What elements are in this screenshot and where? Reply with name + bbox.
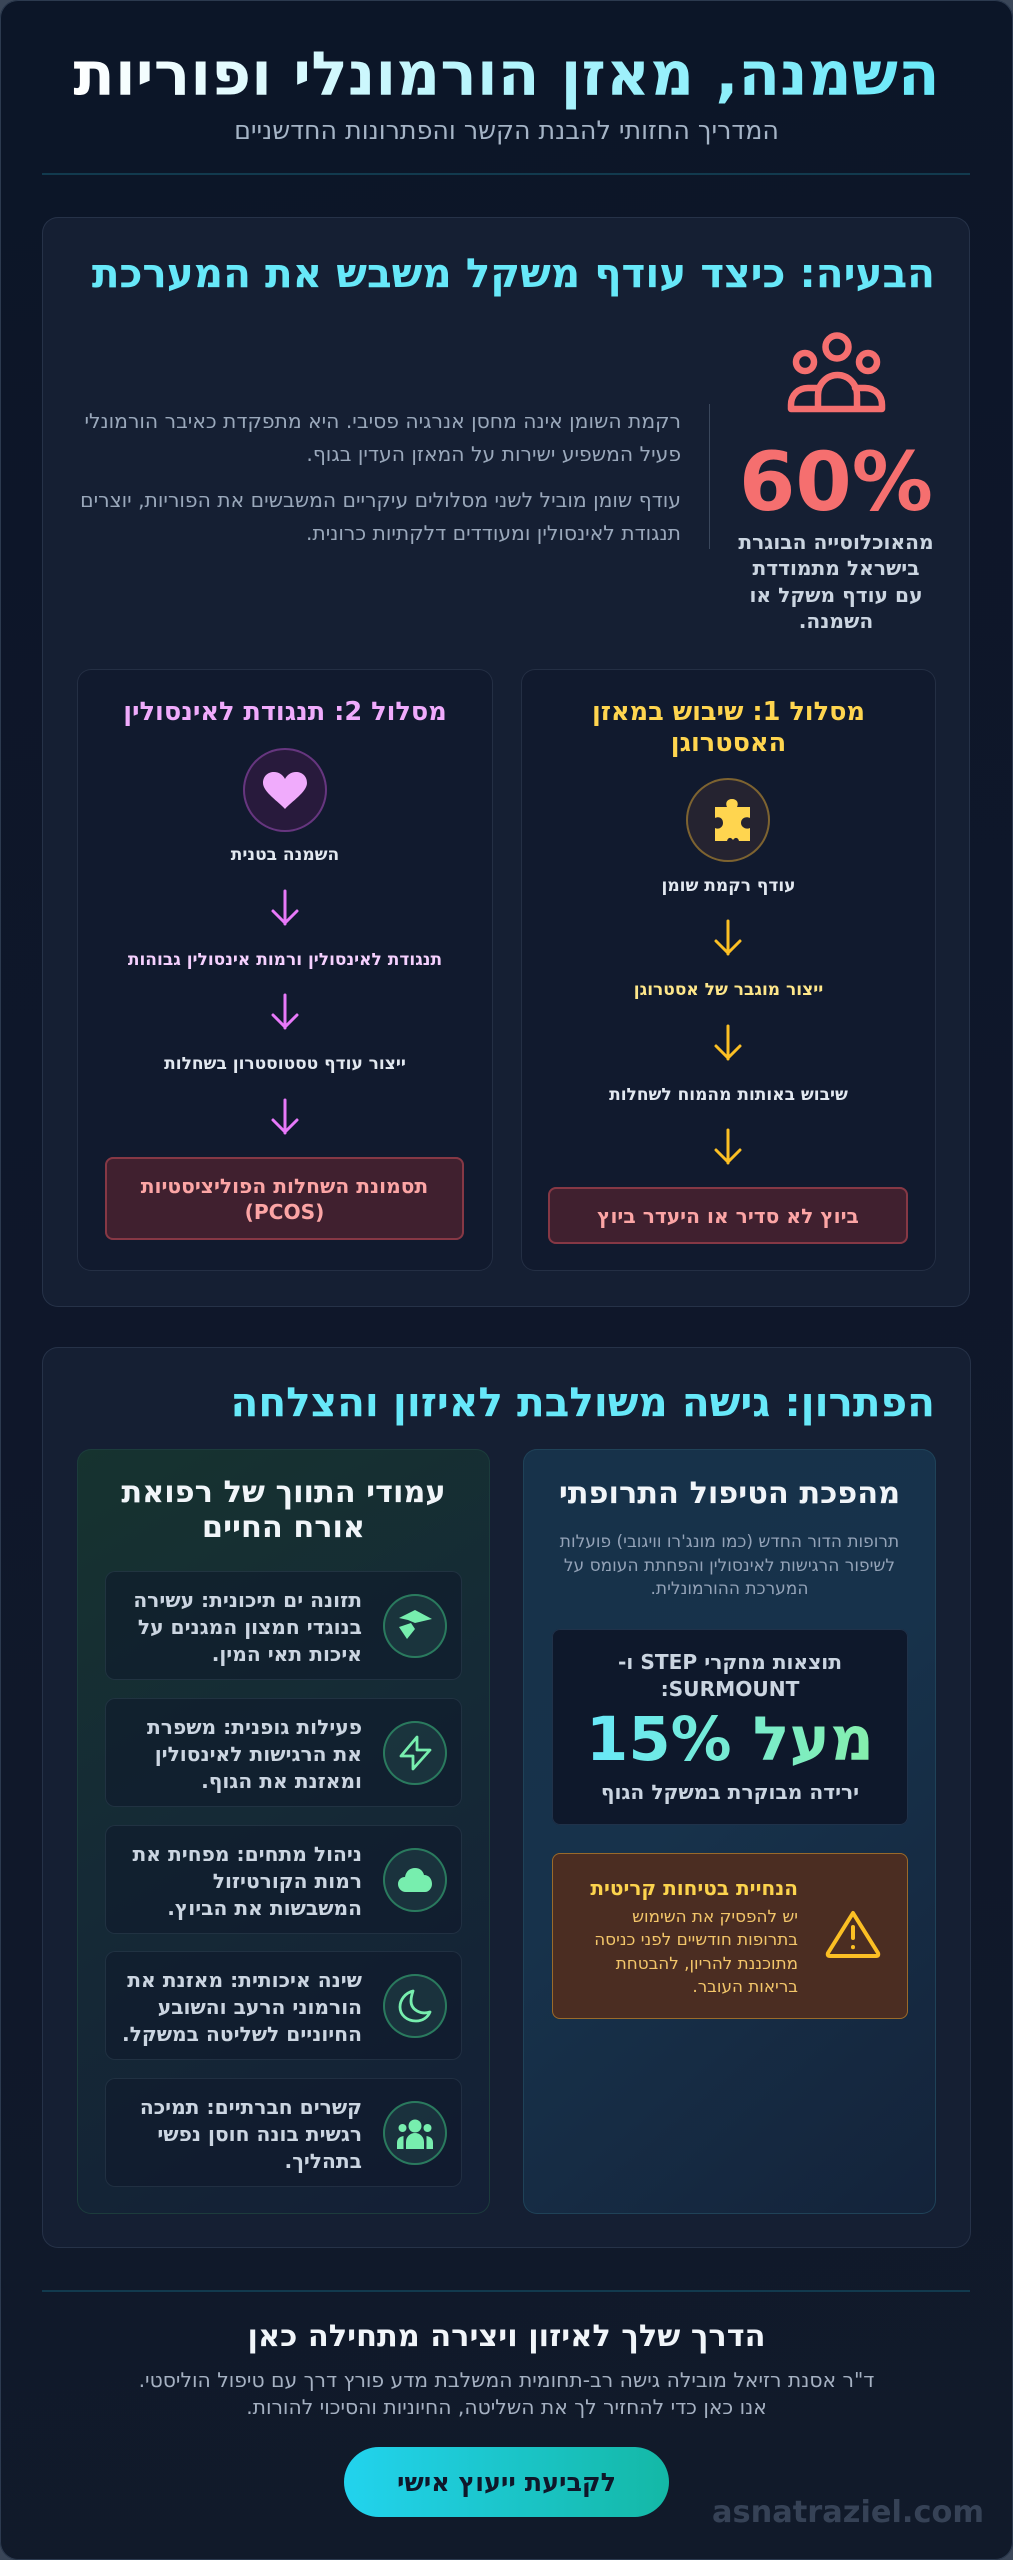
arrow bbox=[271, 994, 299, 1030]
warning text: בתרופות חודשיים לפני כניסה bbox=[594, 1929, 798, 1949]
item text: ניהול מתחים: מפחית את bbox=[132, 1842, 362, 1866]
arrow bbox=[271, 1098, 299, 1134]
item text: פעילות גופנית: משפרת bbox=[147, 1714, 362, 1738]
study heading: SURMOUNT: bbox=[661, 1676, 799, 1700]
icon: people bbox=[383, 2100, 447, 2164]
call to action button bbox=[344, 2447, 669, 2517]
result box: ovulation: ביוץ לא סדיר או היעדר ביוץ bbox=[597, 1204, 859, 1228]
step: signal disruption: שיבוש באותות מהמוח לשחלות bbox=[609, 1085, 848, 1105]
statistic caption: השמנה. bbox=[799, 609, 873, 633]
footer text: אנו כאן כדי להחזיר לך את השליטה, החיוניות והסיכוי להורות. bbox=[246, 2395, 767, 2419]
icon: moon bbox=[383, 1974, 447, 2038]
icon: leaf bbox=[383, 1594, 447, 1658]
item: social ties bbox=[105, 2078, 462, 2187]
icon: warning triangle bbox=[826, 1910, 880, 1958]
result box: PCOS: (PCOS) bbox=[245, 1200, 324, 1224]
step: excess testosterone: ייצור עודף טסטוסטרון בשחלות bbox=[164, 1054, 406, 1074]
icon: group of people bbox=[788, 332, 886, 412]
item text: בתהליך. bbox=[285, 2148, 362, 2172]
arrow bbox=[714, 1128, 742, 1164]
pathway 1 heading: מסלול 1: שיבוש במאזן bbox=[592, 696, 865, 726]
intro text: תנגודת לאינסולין ומעודדים דלקתיות כרונית. bbox=[306, 521, 681, 545]
statistic: 60 percent bbox=[738, 332, 934, 633]
panel: pathway 2 bbox=[77, 669, 493, 1271]
item text bbox=[132, 1842, 362, 1920]
panel: medical revolution bbox=[523, 1449, 936, 2214]
statistic caption: ירידה מבוקרת במשקל הגוף bbox=[601, 1780, 859, 1804]
warning text: בריאות העובר. bbox=[692, 1976, 798, 1996]
result box: PCOS bbox=[105, 1157, 464, 1240]
statistic box: 15 percent bbox=[552, 1629, 908, 1825]
item: mediterranean diet bbox=[105, 1571, 462, 1680]
item text bbox=[133, 1588, 362, 1666]
callout: safety warning bbox=[552, 1853, 908, 2019]
subtitle: המדריך החזותי להבנת הקשר והפתרונות החדשניים bbox=[234, 116, 779, 145]
warning text: יש להפסיק את השימוש bbox=[632, 1906, 798, 1926]
item text bbox=[147, 1714, 362, 1793]
item text: החיוניים לשליטה במשקל. bbox=[122, 2022, 362, 2046]
vertical divider bbox=[709, 404, 710, 549]
statistic caption: עם עודף משקל או bbox=[749, 583, 923, 607]
call to action button: לקביעת ייעוץ אישי bbox=[397, 2467, 616, 2497]
warning text: מתוכננת להריון, להבטחת bbox=[616, 1953, 798, 1973]
pathway 2 heading: מסלול 2: תנגודת לאינסולין bbox=[123, 696, 447, 726]
warning text bbox=[594, 1906, 798, 1996]
item text bbox=[122, 1968, 362, 2046]
arrow bbox=[714, 920, 742, 956]
item text: את הרגישות לאינסולין bbox=[155, 1742, 362, 1766]
item: physical activity bbox=[105, 1698, 462, 1807]
step: excess fat: עודף רקמת שומן bbox=[662, 876, 796, 896]
heading: the problem: הבעיה: כיצד עודף משקל משבש את המערכת bbox=[92, 249, 935, 297]
item text bbox=[140, 2094, 362, 2173]
item text: רמות הקורטיזול bbox=[213, 1868, 362, 1892]
footer heading: הדרך שלך לאיזון ויצירה מתחילה כאן bbox=[248, 2319, 765, 2354]
icon: cloud bbox=[383, 1848, 447, 1912]
item text: איכות תאי המין. bbox=[212, 1642, 362, 1666]
step: increased estrogen: ייצור מוגבר של אסטרוגן bbox=[634, 980, 823, 1000]
intro text: פעיל המשפיע ישירות על המאזן העדין בגוף. עודף שומן מוביל לשני מסלולים עיקריים המשבשים את הפוריות, יוצרים bbox=[80, 442, 681, 512]
panel: pathway 1 bbox=[521, 669, 936, 1271]
item text: ומאזנת את הגוף. bbox=[201, 1768, 362, 1792]
intro text: רקמת השומן אינה מחסן אנרגיה פסיבי. היא מתפקדת כאיבר הורמונלי bbox=[84, 409, 681, 433]
item: quality sleep bbox=[105, 1951, 462, 2060]
pathway 1 heading bbox=[592, 696, 865, 758]
item text: שינה איכותית: מאזנת את bbox=[127, 1968, 362, 1992]
item text: תזונה ים תיכונית: עשירה bbox=[133, 1588, 362, 1612]
icon: lightning bolt bbox=[383, 1720, 447, 1784]
result box: PCOS: תסמונת השחלות הפוליציסטיות bbox=[141, 1174, 428, 1198]
footer text bbox=[139, 2368, 874, 2419]
footer text: ד"ר אסנת רזיאל מובילה גישה רב-תחומית המשלבת מדע פורץ דרך עם טיפול הוליסטי. bbox=[139, 2368, 874, 2392]
arrow bbox=[714, 1024, 742, 1060]
item: stress management bbox=[105, 1825, 462, 1934]
icon: heart bbox=[243, 748, 327, 832]
big number 60%: 60% bbox=[739, 436, 933, 530]
panel: the problem bbox=[42, 217, 970, 1307]
title: השמנה, מאזן הורמונלי ופוריות bbox=[73, 40, 940, 110]
item text: הורמוני הרעב והשובע bbox=[158, 1994, 362, 2018]
result box: ovulation bbox=[548, 1187, 908, 1244]
panel: lifestyle pillars bbox=[77, 1449, 490, 2214]
big number over 15%: מעל 15% bbox=[586, 1705, 874, 1775]
study heading bbox=[618, 1650, 842, 1700]
item text: רגשית בונה חוסן נפשי bbox=[157, 2122, 362, 2146]
item text: בנוגדי חמצון המגנים על bbox=[138, 1614, 362, 1638]
step: abdominal obesity: השמנה בטנית bbox=[231, 845, 339, 865]
icon: puzzle piece bbox=[686, 778, 770, 862]
description bbox=[560, 1532, 899, 1599]
step: insulin resistance: תנגודת לאינסולין ורמות אינסולין גבוהות bbox=[128, 950, 442, 970]
heading: מהפכת הטיפול התרופתי bbox=[559, 1476, 900, 1511]
heading bbox=[121, 1474, 446, 1544]
statistic caption: מהאוכלוסייה הבוגרת bbox=[738, 530, 934, 554]
item text: קשרים חברתיים: תמיכה bbox=[140, 2094, 362, 2118]
description: המערכת ההורמונלית. bbox=[651, 1579, 808, 1599]
item text: המשבשות את הביוץ. bbox=[167, 1896, 362, 1920]
arrow bbox=[271, 890, 299, 926]
description: לשיפור הרגישות לאינסולין והפחתת העומס על bbox=[564, 1556, 895, 1576]
description: תרופות הדור החדש (כמו מונג'רו וויגובי) פועלות bbox=[560, 1532, 899, 1552]
intro text bbox=[80, 409, 681, 545]
statistic caption bbox=[738, 530, 934, 633]
study heading: תוצאות מחקרי STEP ו- bbox=[618, 1650, 842, 1674]
pathway 1 heading: האסטרוגן bbox=[671, 728, 786, 758]
statistic caption: בישראל מתמודדת bbox=[752, 556, 920, 580]
heading: אורח החיים bbox=[202, 1510, 365, 1544]
warning title: הנחיית בטיחות קריטית bbox=[590, 1876, 798, 1900]
watermark: asnatraziel.com bbox=[712, 2495, 984, 2530]
panel: the solution bbox=[42, 1347, 971, 2248]
heading: the solution: הפתרון: גישה משולבת לאיזון והצלחה bbox=[230, 1378, 935, 1426]
heading: עמודי התווך של רפואת bbox=[121, 1474, 446, 1510]
